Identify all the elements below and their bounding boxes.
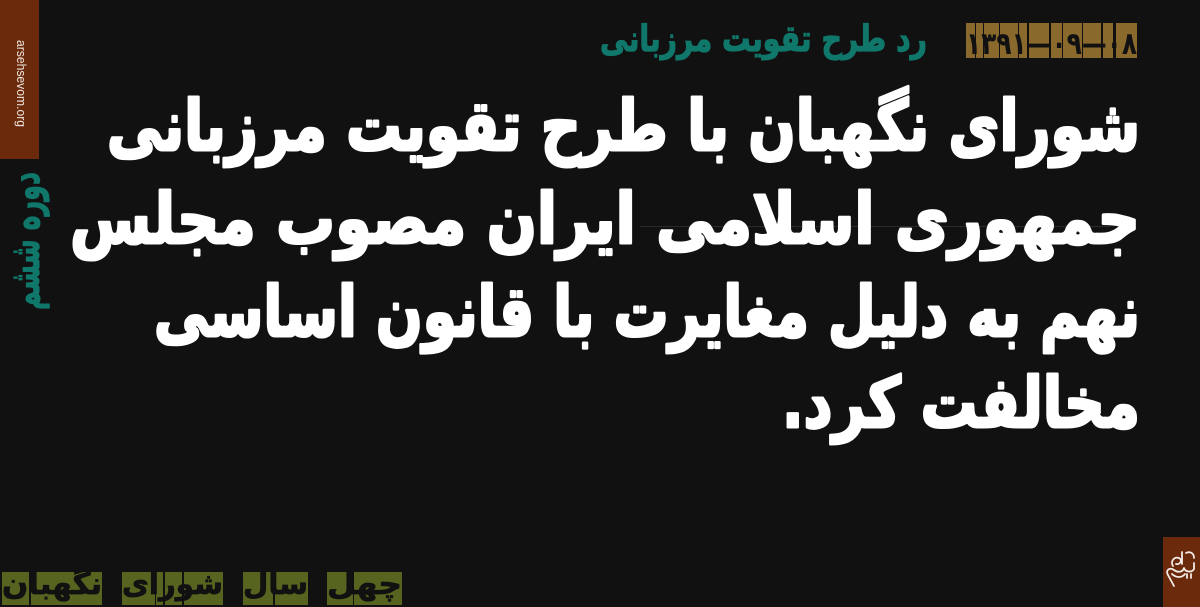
- headline: [70, 85, 1140, 444]
- subtitle: رد طرح تقویت مرزبانی: [600, 19, 927, 60]
- logo tab: [1163, 537, 1200, 607]
- footer badge: forty years of the guardian council: [2, 566, 402, 605]
- footer text: [2, 566, 402, 602]
- footer text: نگهبان: [2, 566, 102, 602]
- date badge: [966, 23, 1137, 62]
- side tab: website: [0, 0, 39, 159]
- footer text: چهل: [327, 567, 402, 602]
- footer text: سال: [243, 567, 308, 602]
- footer text: شورای: [122, 567, 223, 602]
- vertical label: term six: دوره ششم: [0, 172, 50, 310]
- icon: calligraphic logo: [1167, 552, 1194, 586]
- date text: ۱۳۹۱—۰۹—۰۸: [966, 26, 1137, 62]
- website label: arsehsevom.org: [14, 40, 29, 127]
